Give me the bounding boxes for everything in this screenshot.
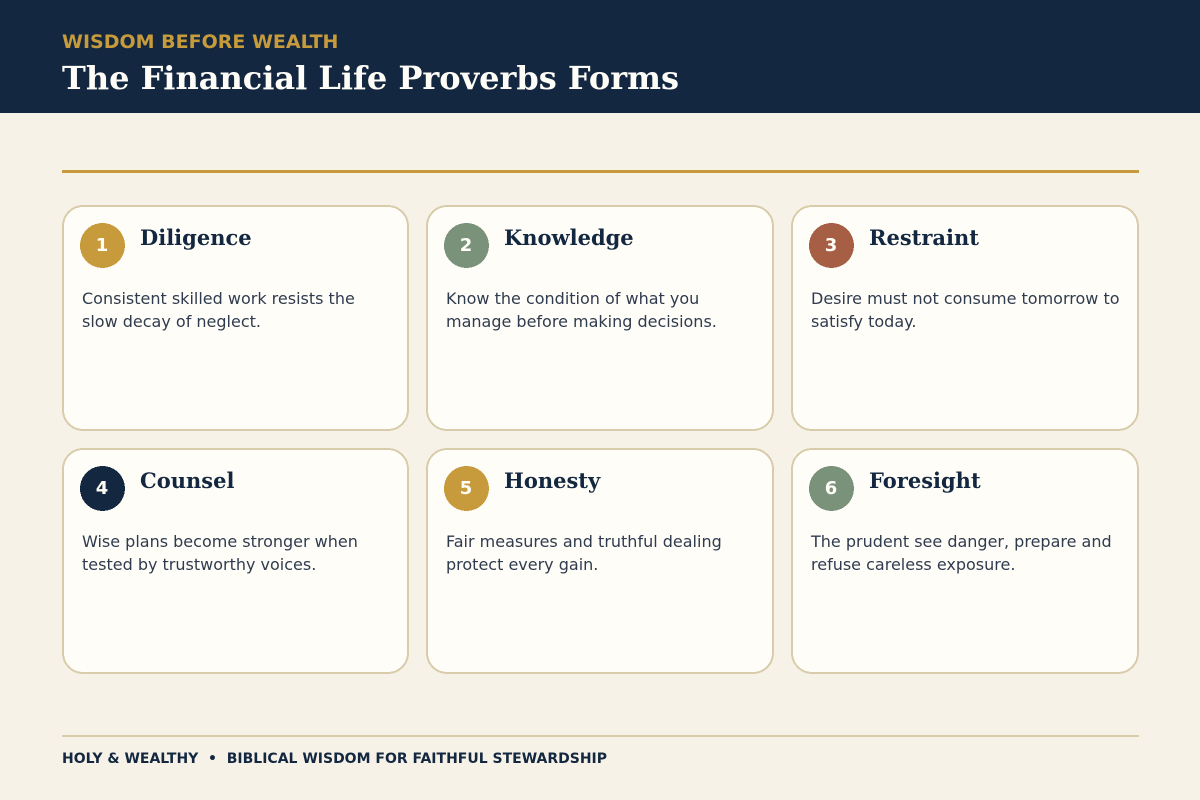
panel: Counsel — [63, 449, 408, 673]
badge 2: 2 — [460, 235, 472, 256]
description: Fair measures and truthful dealing — [446, 532, 722, 551]
badge 2 — [444, 223, 489, 268]
badge 3: 3 — [825, 235, 837, 256]
footer text: HOLY & WEALTHY • BIBLICAL WISDOM FOR FAITHFUL STEWARDSHIP — [62, 751, 607, 767]
panel: Restraint — [792, 206, 1138, 430]
badge 3 — [809, 223, 854, 268]
panel: Foresight — [792, 449, 1138, 673]
heading: Restraint — [869, 225, 979, 250]
description: The prudent see danger, prepare and — [811, 532, 1112, 551]
heading: Diligence — [140, 225, 252, 250]
badge 4 — [80, 466, 125, 511]
description: refuse careless exposure. — [811, 555, 1015, 574]
gold rule — [62, 170, 1139, 173]
panel: Knowledge — [427, 206, 773, 430]
description: satisfy today. — [811, 312, 916, 331]
badge 6: 6 — [825, 478, 837, 499]
description: protect every gain. — [446, 555, 598, 574]
panel: Diligence — [63, 206, 408, 430]
footer rule — [62, 735, 1139, 737]
kicker: WISDOM BEFORE WEALTH — [62, 31, 338, 53]
heading: Honesty — [504, 468, 601, 493]
badge 4: 4 — [96, 478, 108, 499]
title: The Financial Life Proverbs Forms — [62, 59, 679, 97]
description: tested by trustworthy voices. — [82, 555, 316, 574]
badge 1 — [80, 223, 125, 268]
description: Wise plans become stronger when — [82, 532, 358, 551]
heading: Foresight — [869, 468, 981, 493]
badge 5: 5 — [460, 478, 472, 499]
badge 6 — [809, 466, 854, 511]
panel: Honesty — [427, 449, 773, 673]
badge 1: 1 — [96, 235, 108, 256]
heading: Knowledge — [504, 225, 634, 250]
header band — [0, 0, 1200, 113]
description: manage before making decisions. — [446, 312, 717, 331]
description: Consistent skilled work resists the — [82, 289, 355, 308]
description: Desire must not consume tomorrow to — [811, 289, 1120, 308]
description: Know the condition of what you — [446, 289, 699, 308]
description: slow decay of neglect. — [82, 312, 261, 331]
badge 5 — [444, 466, 489, 511]
heading: Counsel — [140, 468, 234, 493]
